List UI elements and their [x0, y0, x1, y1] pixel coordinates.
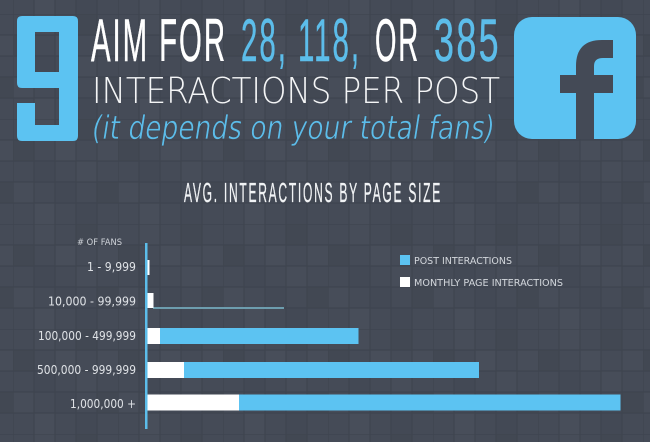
title: 385 [434, 7, 501, 74]
title: AIM FOR [91, 7, 227, 74]
axis line [145, 243, 148, 429]
note: (it depends on your total fans) [92, 108, 495, 147]
legend item: post interactions: POST INTERACTIONS [414, 256, 512, 267]
legend [400, 255, 563, 289]
title: 28, 118, [241, 7, 361, 74]
row: 10,000 - 99,999 [48, 293, 284, 309]
row: 1,000,000 +: 1,000,000 + [70, 397, 136, 411]
icon: facebook logo [514, 17, 636, 139]
row: 500,000 - 999,999: 500,000 - 999,999 [37, 363, 136, 377]
subtitle: INTERACTIONS PER POST [92, 71, 500, 112]
icon: number 9 [17, 16, 78, 141]
axis title: # OF FANS [77, 238, 122, 248]
title: OR [375, 7, 420, 74]
row: 500,000 - 999,999 [37, 362, 479, 378]
row: 1,000,000 + [70, 394, 620, 411]
row: 10,000 - 99,999: 10,000 - 99,999 [48, 294, 136, 308]
row: 100,000 - 499,999: 100,000 - 499,999 [38, 329, 136, 343]
row: 100,000 - 499,999 [38, 328, 358, 344]
legend item: monthly page interactions: MONTHLY PAGE INTERACTIONS [414, 278, 563, 289]
row: 1 - 9,999: 1 - 9,999 [87, 260, 136, 274]
title [91, 7, 501, 74]
bar chart [37, 238, 620, 429]
